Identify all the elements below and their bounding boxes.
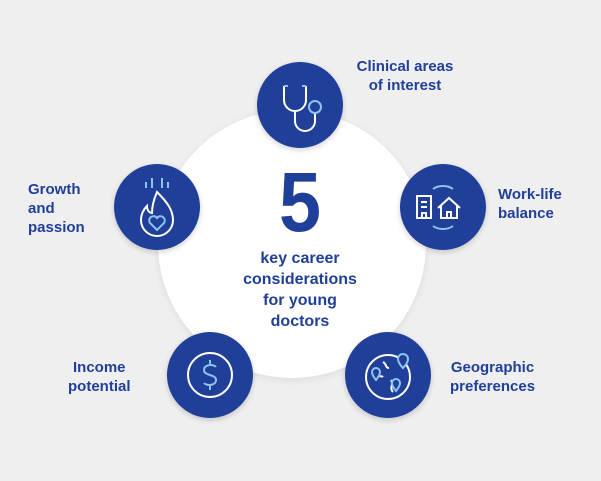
label: geographic: Geographic [451, 359, 534, 376]
center text: considerations [243, 271, 357, 288]
icon: stethoscope [257, 62, 343, 148]
label: income: potential [68, 378, 130, 395]
label: work-life [498, 186, 562, 222]
center number: 5 [279, 155, 321, 249]
label: growth: passion [28, 219, 85, 236]
label: growth: and [28, 200, 55, 217]
icon: dollar [167, 332, 253, 418]
label: clinical [357, 58, 453, 94]
label: clinical: of interest [369, 77, 441, 94]
center text: doctors [271, 313, 329, 330]
icon: globe pins [345, 332, 431, 418]
label: work-life: balance [498, 205, 554, 222]
icon: work-life [400, 164, 486, 250]
center text: key career [260, 250, 340, 267]
center text: for young [263, 292, 337, 309]
label: growth [28, 181, 85, 236]
label: geographic: preferences [450, 378, 535, 395]
label: work-life: Work-life [498, 186, 562, 203]
icon: flame heart [114, 164, 200, 250]
central white circle [158, 110, 426, 378]
label: geographic [450, 359, 535, 395]
label: income [68, 359, 130, 395]
label: clinical: Clinical areas [357, 58, 453, 75]
center text [243, 250, 357, 330]
label: growth: Growth [28, 181, 80, 198]
label: income: Income [73, 359, 126, 376]
